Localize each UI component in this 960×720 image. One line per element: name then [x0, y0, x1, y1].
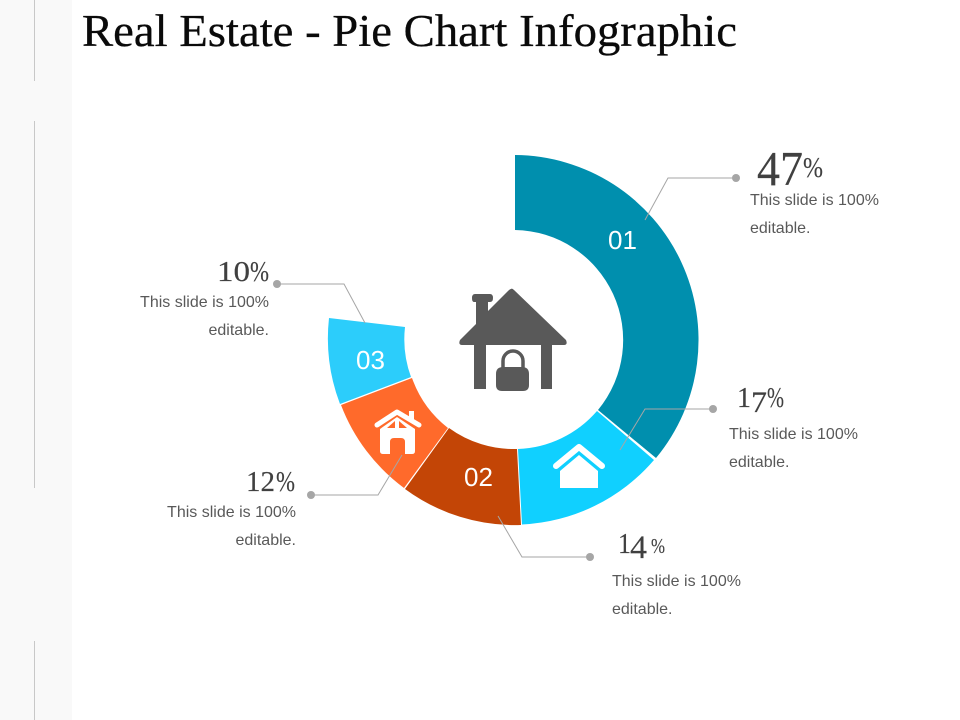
callout: 17%: This slide is 100%	[729, 426, 858, 443]
callout: 12%: %	[276, 467, 295, 498]
donut chart	[328, 155, 699, 525]
segment: 12%	[341, 378, 448, 488]
callout: 14%: %	[651, 534, 665, 558]
icon: white house on blue segment	[556, 447, 602, 488]
callout: 47%: editable.	[750, 220, 810, 237]
callout: 12%: 12	[246, 467, 275, 498]
callout: 10%: This slide is 100%	[140, 294, 269, 311]
callout: 12%: editable.	[236, 532, 296, 549]
callout: 14%: editable.	[612, 601, 672, 618]
callout: 47%	[645, 141, 879, 237]
callout: 17%: 1	[737, 383, 751, 414]
callout: 10%	[140, 257, 365, 339]
segment: 17%	[518, 411, 654, 524]
callout: 12%: This slide is 100%	[167, 504, 296, 521]
icon: white home on orange segment	[377, 411, 419, 454]
left sidebar strip	[0, 0, 72, 720]
label 01: 01	[608, 225, 637, 255]
callout: 17%	[620, 383, 858, 471]
callout: 47%: %	[803, 152, 823, 184]
segment 03: 10%	[328, 318, 411, 404]
callout: 14%	[498, 516, 741, 618]
icon: house with padlock	[459, 289, 567, 391]
callout: 17%: editable.	[729, 454, 790, 471]
label 02: 02	[464, 462, 493, 492]
callout: 10%: 10	[217, 257, 250, 288]
callout: 14%: 1	[618, 529, 631, 560]
callout: 14%: This slide is 100%	[612, 573, 741, 590]
segment 02: 14%	[405, 428, 521, 525]
callout: 14%: 4	[630, 530, 647, 566]
title: Real Estate - Pie Chart Infographic	[82, 5, 737, 56]
label 03: 03	[356, 345, 385, 375]
callout: 10%: %	[250, 257, 269, 288]
callout: 47%: 47	[757, 141, 803, 196]
callout: 17%: 7	[751, 386, 767, 419]
segment 01: 47%	[515, 155, 699, 458]
callout: 47%: This slide is 100%	[750, 192, 879, 209]
callout: 10%: editable.	[208, 322, 269, 339]
callout: 17%: %	[767, 383, 784, 414]
callout: 12%	[167, 455, 402, 549]
